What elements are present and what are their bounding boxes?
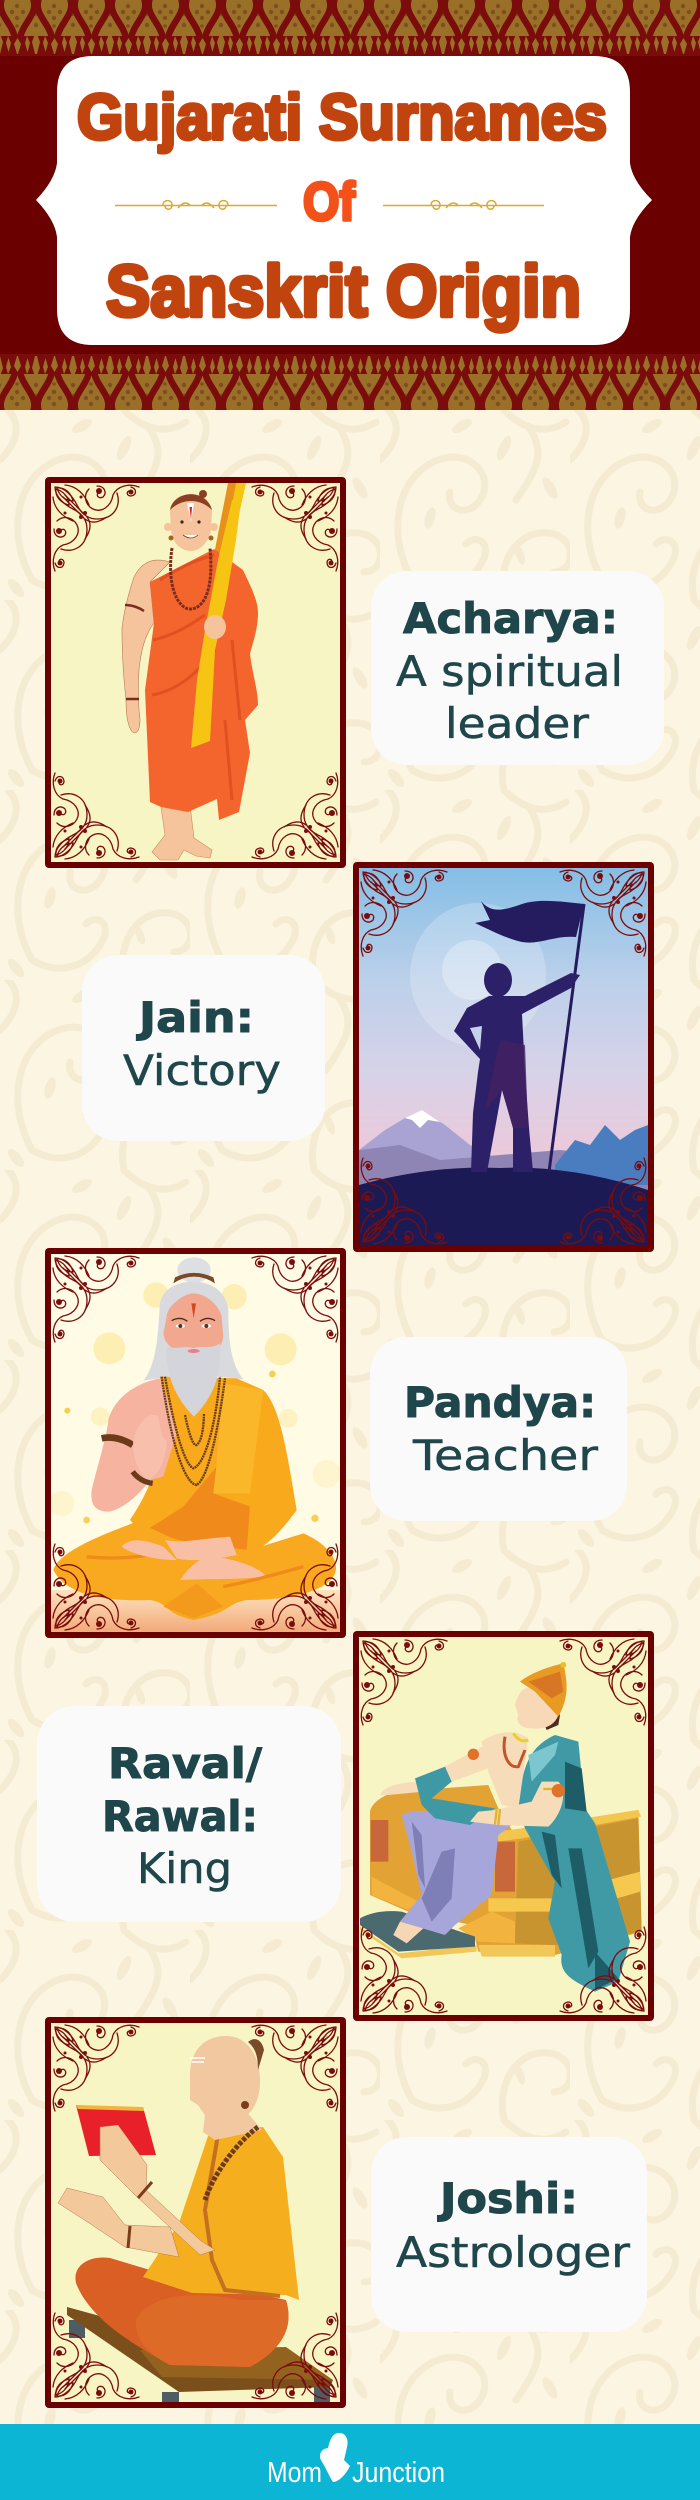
card: Pandya illustration [45,1248,346,1638]
necklaces [162,1377,225,1485]
staff [215,483,246,554]
left sleeve [415,1767,495,1825]
crossed legs [53,1522,336,1620]
hair [143,1282,243,1381]
bubble: Acharya: Acharya: [403,594,618,643]
beard [166,1343,220,1417]
face [163,1293,223,1353]
dhoti [400,1811,512,1935]
lower arm and hand [58,2188,179,2257]
mountains [359,1110,648,1190]
face [515,1687,558,1729]
torso robe [130,1377,297,1553]
flag pole [549,904,584,1172]
title line 2: Of [303,172,356,232]
bottom gold border pattern [0,354,700,410]
header banner [0,0,700,410]
hill silhouette [359,1168,648,1246]
robe front edge [205,2135,280,2296]
wrist band [133,1472,153,1483]
upper arm and hand [100,2125,215,2255]
right arm [470,1782,563,1827]
raised arm [91,1378,177,1512]
robe folds [152,555,240,800]
bubble: Rawal: King [137,1844,232,1893]
crown [520,1663,567,1717]
card: Joshi illustration [45,2017,346,2408]
necklace [504,1737,525,1767]
title line 1: Gujarati Surnames [77,81,607,153]
man silhouette [454,963,580,1172]
leg highlights [87,1555,303,1587]
bubble: Joshi: Joshi: [437,2174,578,2223]
bubble: Pandya [370,1337,627,1521]
right gold ornament [383,200,544,209]
logo wordmark Junction: Junction [352,2457,445,2489]
bubble: Acharya: A spiritual [396,647,623,696]
shawl [518,1735,630,1992]
palm [133,1415,167,1480]
robe shading [147,1467,250,1550]
bubble: Rawal [37,1706,341,1922]
head [190,2036,264,2140]
mandala flowers [49,1282,341,1523]
book [76,2105,156,2156]
top gold border pattern [0,0,700,56]
sun glow [410,903,546,1047]
logo wordmark Mom: Mom [267,2457,322,2489]
bubble: Joshi: Astrologer [396,2228,631,2277]
bubble: Jain: Jain: [136,993,254,1042]
orange robe [145,549,258,820]
hair band [173,1273,215,1283]
bubble: Acharya [371,571,664,765]
left gold ornament [115,200,277,209]
logo mark [320,2433,350,2482]
bracelets [128,2182,152,2248]
card: Jain illustration [353,862,654,1252]
white title plaque [36,56,652,345]
top knot [177,1257,211,1283]
arm [122,560,170,733]
left arm [380,1745,488,1795]
bubble: Rawal: Raval/ [108,1739,263,1788]
armlet [102,1437,133,1445]
hair [542,1695,560,1730]
bubble: Joshi [371,2137,647,2332]
title line 3: Sanskrit Origin [106,252,581,332]
card: Rawal illustration [353,1631,654,2021]
head [164,490,218,551]
footer bar [0,2424,700,2500]
feet and hands [122,1537,265,1580]
torso [482,1732,528,1808]
tilak and eyes [172,1303,215,1328]
bubble: Pandya: Pandya: [404,1378,596,1427]
bubble: Rawal: Rawal: [102,1792,258,1841]
staff in front of robe [191,500,241,748]
bubble: Jain: Victory [123,1046,281,1095]
floor [50,1590,345,1635]
dhoti [75,2257,289,2367]
maroon band [0,0,700,410]
footstool cushion [360,1911,477,1958]
hand on staff [204,615,226,639]
bangles [495,1789,555,1825]
bench [67,2307,333,2403]
flag [475,901,584,943]
bead necklace [205,2127,258,2200]
bubble: Jain [82,955,325,1141]
shawl shading [542,1762,618,1990]
lips [188,1349,200,1353]
bubble: Acharya: leader [445,699,590,748]
armlet and bracelet [125,605,144,699]
couch [370,1785,642,1957]
bubble: Pandya: Teacher [412,1431,599,1480]
necklace [171,548,211,609]
legs and feet [152,800,212,860]
robe [143,2127,299,2300]
card: Acharya illustration [45,477,346,868]
foot [393,1922,423,1943]
